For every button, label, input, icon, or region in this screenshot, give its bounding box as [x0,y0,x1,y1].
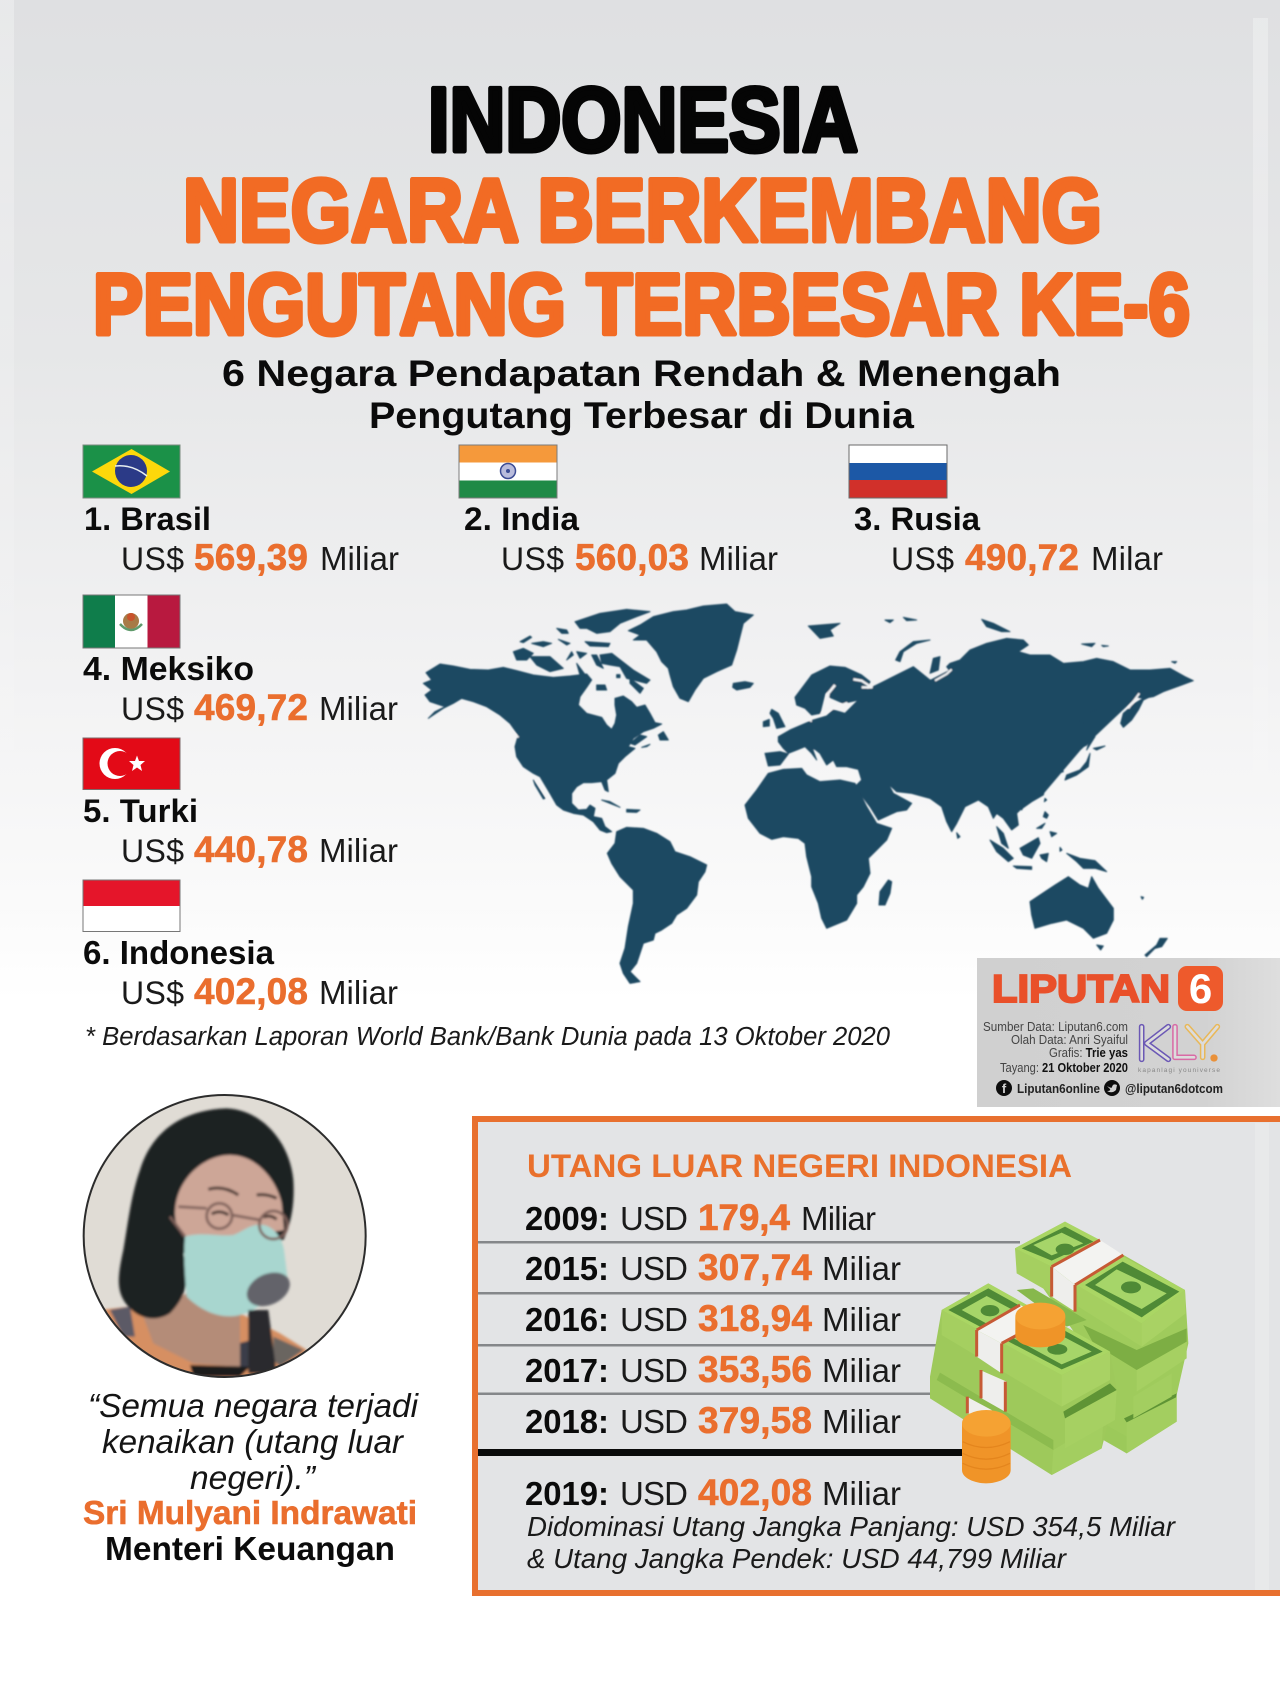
quote [88,1387,420,1496]
country 6: Indonesia: Miliar [319,974,398,1011]
portrait: hair [119,1108,294,1318]
row 2016: 2016: [525,1301,609,1338]
credits [983,1020,1128,1075]
row 2018: Miliar [822,1403,901,1440]
row 2017: USD [620,1352,688,1389]
icon: tall coin stack [962,1410,1011,1483]
KLY tagline: kapanlagi youniverse [1138,1067,1220,1074]
social handles: Liputan6online [1017,1082,1100,1096]
row 2009 [525,1197,876,1238]
row 2019 [525,1472,901,1513]
logo: KLY [1142,1027,1218,1062]
panel: external debt [475,1119,1280,1593]
row 2019: USD [620,1475,688,1512]
portrait: neck [143,1293,240,1367]
social handles: @liputan6dotcom [1125,1082,1223,1096]
row 2019: 2019: [525,1475,609,1512]
country 6: Indonesia: 6. Indonesia [83,934,275,971]
flag: Turkey [83,738,180,790]
country 3: Rusia: 490,72 [965,537,1079,578]
note: debt composition [527,1511,1177,1574]
country 3: Rusia [849,445,1163,578]
country 3: Rusia: Milar [1091,540,1163,577]
country 3: Rusia: 3. Rusia [854,501,980,537]
background gradient [0,0,1280,1000]
portrait: mask [184,1225,287,1316]
quote: “Semua negara terjadi [88,1387,420,1424]
row 2009: Miliar [801,1200,876,1237]
subtitle: Pengutang Terbesar di Dunia [369,395,914,436]
row 2015: Miliar [822,1250,901,1287]
credits: Sumber Data: Liputan6.com [983,1020,1128,1034]
panel heading: UTANG LUAR NEGERI INDONESIA [527,1148,1072,1184]
portrait: clothing [104,1306,308,1376]
row 2018: USD [620,1403,688,1440]
subtitle: 6 Negara Pendapatan Rendah & Menengah [222,353,1061,394]
country 4: Meksiko: 469,72 [194,687,308,728]
country 5: Turki: Miliar [319,832,398,869]
row 2015: USD [620,1250,688,1287]
row 2019: 402,08 [698,1472,812,1513]
row 2015: 307,74 [698,1247,812,1288]
flag: Mexico [83,595,180,648]
country 2: India: US$ [501,541,564,577]
row 2017: 2017: [525,1352,609,1389]
row 2009: USD [620,1200,688,1237]
flag: Indonesia [83,880,180,932]
logo: Liputan6: LIPUTAN [992,968,1170,1011]
social handles [996,1080,1223,1096]
row 2019: Miliar [822,1475,901,1512]
country 4: Meksiko: 4. Meksiko [83,650,254,687]
icon: small coin stack [1015,1303,1065,1347]
row 2017 [525,1349,901,1390]
logo: Liputan6: 6 [1189,965,1212,1012]
row 2009: 2009: [525,1200,609,1237]
social handles: f [1002,1081,1007,1096]
country 4: Meksiko [83,595,398,728]
country 5: Turki: 5. Turki [83,793,198,829]
quote: negeri).” [190,1459,317,1496]
credits: Grafis: Trie yas [1049,1046,1128,1060]
row 2009: 179,4 [698,1197,790,1238]
country 1: Brasil [83,445,399,578]
country 5: Turki: 440,78 [194,829,308,870]
country 1: Brasil: 1. Brasil [84,501,211,537]
country 5: Turki [83,738,398,870]
country 4: Meksiko: Miliar [319,690,398,727]
title: INDONESIA [428,70,858,171]
title [93,70,1190,353]
row 2015 [525,1247,901,1288]
note: debt composition: Didominasi Utang Jangka Panjang: USD 354,5 Miliar [527,1511,1177,1542]
logo: Liputan6 [992,965,1223,1012]
country 2: India [459,445,778,578]
icon: money stacks and coins [930,1222,1188,1483]
country 6: Indonesia: US$ [121,975,184,1011]
note: debt composition: & Utang Jangka Pendek: USD 44,799 Miliar [527,1543,1068,1574]
row 2017: Miliar [822,1352,901,1389]
country 1: Brasil: 569,39 [194,537,308,578]
portrait: Sri Mulyani [80,1093,370,1380]
credits: Tayang: 21 Oktober 2020 [1000,1061,1128,1075]
row 2017: 353,56 [698,1349,812,1390]
row 2018: 2018: [525,1403,609,1440]
country 6: Indonesia [83,880,398,1012]
speaker name: Sri Mulyani Indrawati [83,1494,417,1531]
country 5: Turki: US$ [121,833,184,869]
flag: India [459,445,557,498]
row 2016 [525,1298,901,1339]
map: Eurasia, Africa, Australia [745,617,1193,957]
country 1: Brasil: Miliar [320,540,399,577]
country 4: Meksiko: US$ [121,691,184,727]
world map [423,604,1193,983]
speaker role: Menteri Keuangan [105,1530,395,1567]
icon: front money stack [930,1283,1117,1475]
portrait: glasses [170,1203,287,1239]
flag: Russia [849,445,947,498]
brand block: Liputan6 [977,958,1280,1107]
portrait: microphone [245,1271,292,1308]
row 2018 [525,1400,901,1441]
title: NEGARA BERKEMBANG [183,160,1102,260]
icon: back money stack [1015,1222,1188,1453]
country 1: Brasil: US$ [121,541,184,577]
row 2018: 379,58 [698,1400,812,1441]
row 2015: 2015: [525,1250,609,1287]
map: Americas and Greenland [423,604,753,983]
country 2: India: Miliar [699,540,778,577]
row 2016: 318,94 [698,1298,812,1339]
country 2: India: 2. India [464,501,579,537]
row 2016: USD [620,1301,688,1338]
country 6: Indonesia: 402,08 [194,971,308,1012]
country 2: India: 560,03 [575,537,689,578]
subtitle [222,353,1061,436]
credits: Olah Data: Anri Syaiful [1011,1033,1128,1047]
footnote: * Berdasarkan Laporan World Bank/Bank Dunia pada 13 Oktober 2020 [85,1023,890,1051]
portrait: brows and eyes [208,1188,277,1219]
row 2016: Miliar [822,1301,901,1338]
portrait: face [175,1155,284,1240]
flag: Brazil [83,445,180,498]
quote: kenaikan (utang luar [102,1423,405,1460]
country 3: Rusia: US$ [891,541,954,577]
